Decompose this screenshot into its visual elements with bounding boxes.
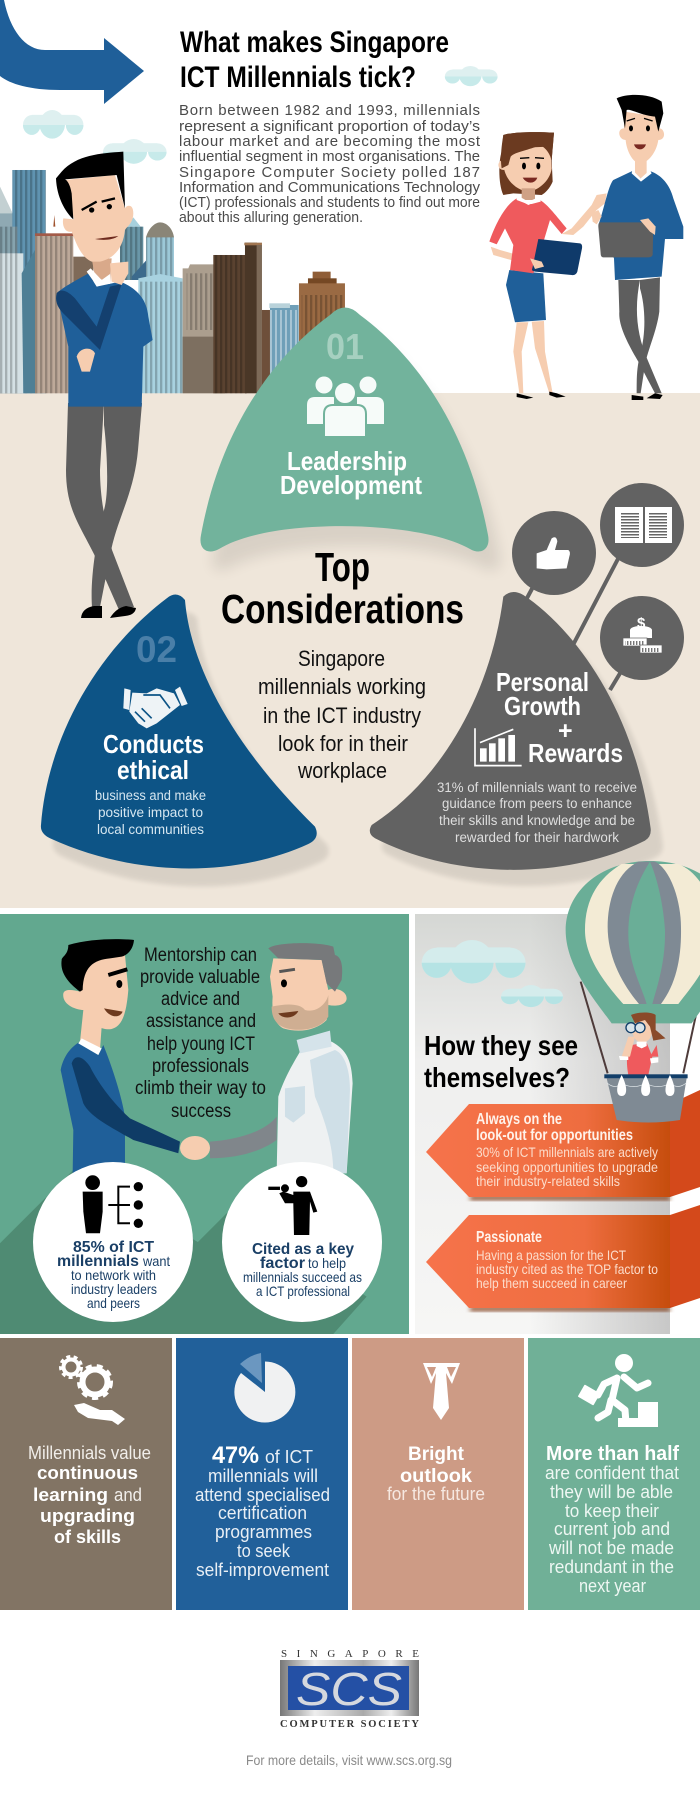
text: more than half: More than half [546, 1443, 679, 1465]
panel: shape 01 leadership development [200, 308, 500, 570]
text: key factor: to help [308, 1255, 346, 1271]
title [180, 26, 449, 94]
intro paragraph [179, 102, 481, 226]
text: ethical description: business and make [95, 788, 206, 803]
heading: how they see themselves [424, 1030, 578, 1093]
circle: 85 percent network [33, 1162, 193, 1322]
heading: leadership development: Leadership [287, 446, 407, 476]
heading: how they see themselves: themselves? [424, 1062, 570, 1093]
text: 85 percent: industry leaders [71, 1281, 157, 1297]
text: mentorship: help young ICT [147, 1034, 255, 1055]
characters: woman and man talking [489, 95, 683, 400]
footer: website note: For more details, visit www.scs.org.sg [246, 1752, 452, 1768]
text: passionate heading: Passionate [476, 1229, 542, 1246]
text: ethical description [95, 788, 206, 837]
man [592, 95, 683, 400]
shape: green petal [200, 308, 489, 551]
text: singapore millennials description [258, 646, 426, 783]
text: growth description: 31% of millennials want to receive [437, 780, 637, 795]
text: opportunities description: seeking opportunities to upgrade [476, 1159, 658, 1175]
text: certification [195, 1442, 330, 1580]
text: more than half: current job and [554, 1519, 670, 1539]
text: opportunities heading: look-out for opportunities [476, 1127, 633, 1144]
text: growth description [437, 780, 637, 845]
icon: coins circle [600, 596, 684, 680]
text: certification: millennials will [208, 1466, 318, 1486]
text: continuous learning: upgrading [40, 1506, 135, 1526]
text: mentorship: Mentorship can [144, 945, 257, 966]
character: young man [61, 939, 180, 1173]
text: more than half: will not be made [548, 1538, 674, 1558]
intro paragraph: Singapore Computer Society polled 187 [179, 164, 480, 181]
hot air balloon [566, 861, 700, 1122]
handshake hands [180, 1136, 210, 1160]
text: certification: self-improvement [196, 1560, 329, 1580]
text: continuous learning: Millennials value [28, 1443, 151, 1463]
text: more than half: they will be able [550, 1482, 673, 1502]
text: ethical description: positive impact to [98, 805, 203, 820]
intro paragraph: labour market and are becoming the most [179, 133, 481, 150]
text: growth description: rewarded for their hardwork [455, 830, 619, 845]
text: singapore millennials description: look for in their [278, 731, 408, 756]
heading: leadership development [280, 446, 422, 500]
heading: conducts ethical [103, 729, 204, 785]
text: more than half: are confident that [545, 1463, 679, 1483]
long shadows [0, 1170, 367, 1334]
text: passionate description [476, 1247, 658, 1291]
text: key factor [243, 1241, 362, 1299]
text: certification: certification [218, 1503, 307, 1523]
text: singapore millennials description: Singapore [298, 646, 385, 671]
panel: continuous learning [0, 1338, 172, 1610]
text: more than half: to keep their [565, 1501, 659, 1521]
icon: coins circle: $ [637, 615, 646, 632]
heading: personal growth: Growth [504, 691, 581, 721]
text: opportunities description: 30% of ICT millennials are actively [476, 1144, 658, 1160]
logo: Singapore Computer Society [280, 1648, 419, 1730]
icon: group of people [307, 376, 384, 437]
circle: key factor [222, 1162, 382, 1322]
text: mentorship: professionals [152, 1056, 249, 1077]
intro paragraph: (ICT) professionals and students to find out more [179, 194, 480, 211]
cloud: upper left [23, 110, 83, 139]
text: 85 percent: millennials [57, 1253, 139, 1270]
text: key factor: millennials succeed as [243, 1269, 362, 1285]
heading: personal growth: + [558, 717, 573, 745]
text: certification: attend specialised [195, 1485, 330, 1505]
text: passionate description: Having a passion for the ICT [476, 1247, 626, 1263]
character: older man [210, 943, 353, 1173]
text: continuous learning: of skills [54, 1527, 121, 1547]
sticks to icon circles [526, 555, 622, 690]
text: mentorship: advice and [161, 989, 240, 1010]
heading: personal growth: Personal [496, 667, 589, 697]
text: mentorship [135, 945, 266, 1122]
icon: person with network [83, 1175, 143, 1233]
icon: climbing man with briefcase [578, 1354, 658, 1427]
text: 85 percent: want [142, 1253, 170, 1269]
heading: top considerations [221, 544, 464, 632]
title: What makes Singapore [180, 26, 449, 59]
text: 85 percent: and peers [87, 1295, 140, 1311]
text: singapore millennials description: in the ICT industry [263, 703, 421, 728]
intro paragraph: influential segment in most organisations. The [179, 148, 480, 165]
panel: shape 03 personal growth and rewards [370, 483, 684, 886]
ribbon: always on the look-out [426, 1090, 700, 1200]
heading: personal growth: Rewards [528, 738, 623, 768]
cloud: small [501, 985, 563, 1007]
heading: conducts ethical: ethical [117, 755, 189, 785]
text: key factor: Cited as a key [252, 1241, 354, 1258]
text: key factor: factor [260, 1255, 305, 1272]
shape: gray petal [370, 592, 651, 870]
text: growth description: their skills and knowledge and be [439, 813, 635, 828]
text: mentorship: climb their way to [135, 1078, 266, 1099]
text: certification: programmes [215, 1522, 312, 1542]
text: certification: to seek [237, 1541, 291, 1561]
city skyline [0, 170, 345, 393]
intro paragraph: represent a significant proportion of today’s [179, 118, 480, 135]
panel: mentorship [0, 914, 409, 1334]
cloud: beside title [445, 66, 498, 86]
heading: top considerations: Top [315, 544, 370, 590]
cloud: large [422, 940, 526, 984]
icon: person holding key [268, 1176, 317, 1235]
text: 85 percent: 85% of ICT [73, 1239, 154, 1256]
text: continuous learning [28, 1443, 151, 1547]
woman [489, 132, 607, 399]
heading: top considerations: Considerations [221, 586, 464, 632]
text: certification: of ICT [265, 1447, 313, 1467]
text: mentorship: provide valuable [140, 967, 260, 988]
text: opportunities description: their industry-related skills [476, 1173, 620, 1189]
text: opportunities heading [476, 1111, 633, 1144]
text: mentorship: success [171, 1101, 231, 1122]
icon: growth chart [475, 728, 522, 766]
heading: personal growth [496, 667, 623, 768]
text: key factor: a ICT professional [256, 1283, 350, 1299]
icon: pie chart [234, 1353, 295, 1422]
shoes [81, 606, 136, 618]
text: continuous learning: and [114, 1485, 142, 1505]
text: more than half [545, 1443, 679, 1596]
upper body [56, 152, 153, 407]
text: bright outlook: outlook [400, 1466, 472, 1487]
text: passionate description: industry cited as the TOP factor to [476, 1261, 658, 1277]
text: more than half: redundant in the [549, 1557, 674, 1577]
icon: necktie [423, 1363, 460, 1420]
logo: Singapore Computer Society: SINGAPORE [281, 1648, 419, 1660]
intro paragraph: Born between 1982 and 1993, millennials [179, 102, 480, 119]
icon: gears on hand [60, 1356, 125, 1425]
intro paragraph: about this alluring generation. [179, 209, 363, 226]
logo: Singapore Computer Society: SCS [296, 1663, 402, 1715]
text: opportunities description [476, 1144, 658, 1189]
text: bright outlook: for the future [387, 1484, 485, 1504]
text: 85 percent [57, 1239, 170, 1311]
text: continuous learning: continuous [37, 1463, 138, 1483]
text: growth description: guidance from peers to enhance [442, 796, 632, 811]
woman with binoculars [619, 1012, 666, 1075]
text: passionate description: help them succeed in career [476, 1275, 627, 1291]
text: 85 percent: to network with [71, 1267, 156, 1283]
icon: book circle [600, 483, 684, 567]
intro paragraph: Information and Communications Technology [179, 179, 481, 196]
beige ground band [0, 393, 700, 908]
text: bright outlook [387, 1444, 485, 1504]
text: certification: 47% [212, 1442, 259, 1469]
text: mentorship: assistance and [146, 1011, 256, 1032]
text: bright outlook: Bright [408, 1444, 465, 1465]
basket [604, 1074, 688, 1122]
title: ICT Millennials tick? [180, 61, 416, 94]
heading: how they see themselves: How they see [424, 1030, 578, 1061]
text: continuous learning: learning [33, 1485, 108, 1505]
number 01: 01 [326, 326, 364, 367]
text: singapore millennials description: millennials working [258, 674, 426, 699]
text: opportunities heading: Always on the [476, 1111, 562, 1128]
panel: shape 02 conducts ethical [41, 595, 329, 886]
icon: handshake [123, 687, 188, 728]
trousers and crossed legs [66, 403, 142, 610]
text: singapore millennials description: workplace [297, 758, 387, 783]
heading: leadership development: Development [280, 470, 422, 500]
logo: Singapore Computer Society: COMPUTER SOCIETY [280, 1719, 419, 1730]
panel: 47 percent certification [176, 1338, 348, 1610]
cloud: behind thinking man [103, 139, 167, 164]
ribbon: passionate [426, 1205, 700, 1311]
panel: how they see themselves [415, 861, 700, 1334]
arrow: blue curved arrow [0, 0, 144, 104]
shape: blue petal [41, 595, 317, 868]
text: ethical description: local communities [97, 822, 204, 837]
panel: more than half [528, 1338, 700, 1610]
character: thinking man [56, 152, 153, 618]
heading: conducts ethical: Conducts [103, 729, 204, 759]
panel: bright outlook [352, 1338, 524, 1610]
icon: thumbs up circle [512, 511, 596, 595]
text: more than half: next year [579, 1576, 646, 1596]
number 02: 02 [136, 629, 177, 670]
